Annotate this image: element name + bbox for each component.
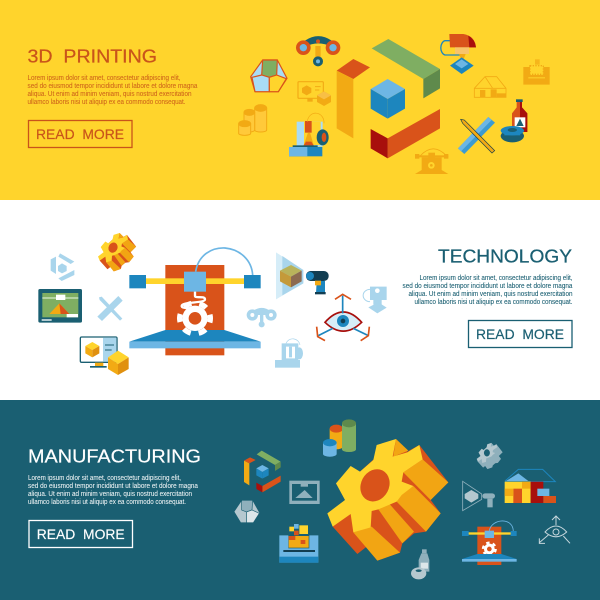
text block: lorem ipsum: ullamco laboris nisi ut aliquip ex ea commodo consequat. bbox=[28, 99, 186, 106]
icon: dodecahedron bbox=[234, 500, 260, 523]
text block: lorem ipsum: ullamco laboris nisi ut aliquip ex ea commodo consequat. bbox=[28, 499, 186, 506]
illustration: right side icons bbox=[275, 287, 387, 368]
icon: printer outline bbox=[415, 149, 448, 174]
illustration: large 3D gear bbox=[327, 439, 448, 561]
button: read more bbox=[28, 120, 132, 148]
text block: lorem ipsum: ullamco laboris nisi ut aliquip ex ea commodo consequat. bbox=[414, 299, 573, 306]
icon: bottle and spool bbox=[411, 549, 429, 579]
logo: isometric cube bbox=[337, 39, 440, 158]
icon: eye with axes bbox=[317, 294, 369, 341]
icon: pixel printer bbox=[279, 524, 318, 563]
text block: lorem ipsum bbox=[402, 275, 573, 306]
icon: logo outline bbox=[51, 253, 74, 281]
icon: print head outline bbox=[363, 287, 387, 313]
text block: lorem ipsum: sed do eiusmod tempor incididunt ut labore et dolore magna bbox=[28, 483, 198, 490]
icon: printed house bbox=[474, 77, 506, 97]
icon: ruler and pencil bbox=[458, 117, 495, 154]
icon: cylinders bbox=[323, 419, 356, 457]
button: read more: READ MORE bbox=[36, 126, 124, 142]
icon: printed house bbox=[505, 469, 556, 503]
text block: lorem ipsum: Lorem ipsum dolor sit amet, consectetur adipiscing elit, bbox=[28, 475, 181, 482]
illustration: yellow panel icons bbox=[239, 34, 550, 174]
icon: 3D scanner bbox=[276, 252, 329, 299]
icon: tablet bbox=[38, 289, 82, 323]
icon: desktop 3D printer bbox=[289, 113, 329, 156]
text block: lorem ipsum: aliqua. Ut enim ad minim veniam, quis nostrud exercitation bbox=[28, 491, 192, 498]
button: read more bbox=[468, 320, 572, 348]
text block: lorem ipsum: Lorem ipsum dolor sit amet, consectetur adipiscing elit, bbox=[420, 275, 573, 282]
icon: printer screen bbox=[289, 481, 320, 504]
text block: lorem ipsum: Lorem ipsum dolor sit amet, consectetur adipiscing elit, bbox=[28, 75, 181, 82]
icon: ruler and pencil bbox=[97, 296, 123, 321]
button: read more: READ MORE bbox=[37, 526, 125, 542]
heading: technology: TECHNOLOGY bbox=[438, 246, 572, 266]
illustration: teal panel icons bbox=[234, 419, 570, 579]
icon: desktop printer outline bbox=[275, 339, 303, 368]
icon: resin bottle bbox=[512, 99, 527, 132]
icon: cylinders bbox=[239, 105, 267, 135]
illustration: white panel icons bbox=[38, 248, 329, 375]
panel: technology bbox=[0, 200, 600, 400]
icon: 3D gear bbox=[98, 233, 136, 271]
heading: 3D printing: 3D PRINTING bbox=[28, 46, 157, 66]
heading: manufacturing: MANUFACTURING bbox=[28, 445, 201, 466]
illustration: large 3D printer bbox=[129, 248, 261, 355]
icon: small 3D printer bbox=[462, 521, 517, 565]
icon: pixel printer bbox=[523, 59, 550, 85]
icon: dodecahedron bbox=[251, 60, 287, 92]
icon: print head bbox=[441, 34, 476, 74]
icon: rollers outline bbox=[247, 308, 277, 327]
text block: lorem ipsum bbox=[28, 75, 198, 106]
text block: lorem ipsum: aliqua. Ut enim ad minim veniam, quis nostrud exercitation bbox=[408, 291, 573, 298]
icon: filament rollers bbox=[296, 36, 340, 66]
text block: lorem ipsum bbox=[28, 475, 198, 506]
button: read more bbox=[29, 520, 132, 548]
panel: manufacturing bbox=[0, 400, 600, 600]
text block: lorem ipsum: sed do eiusmod tempor incididunt ut labore et dolore magna bbox=[402, 283, 573, 290]
panel: 3D printing bbox=[0, 0, 600, 200]
text block: lorem ipsum: aliqua. Ut enim ad minim veniam, quis nostrud exercitation bbox=[28, 91, 192, 98]
icon: eye outline bbox=[539, 516, 570, 543]
icon: logo bbox=[244, 451, 281, 492]
button: read more: READ MORE bbox=[476, 326, 564, 342]
text block: lorem ipsum: sed do eiusmod tempor incididunt ut labore et dolore magna bbox=[28, 83, 198, 90]
icon: scanner outline bbox=[463, 481, 495, 511]
icon: computer with cube bbox=[298, 82, 331, 106]
icon: computer with cube bbox=[80, 337, 129, 375]
icon: gear outline bbox=[477, 443, 503, 469]
icon: filament spool bbox=[501, 126, 524, 142]
